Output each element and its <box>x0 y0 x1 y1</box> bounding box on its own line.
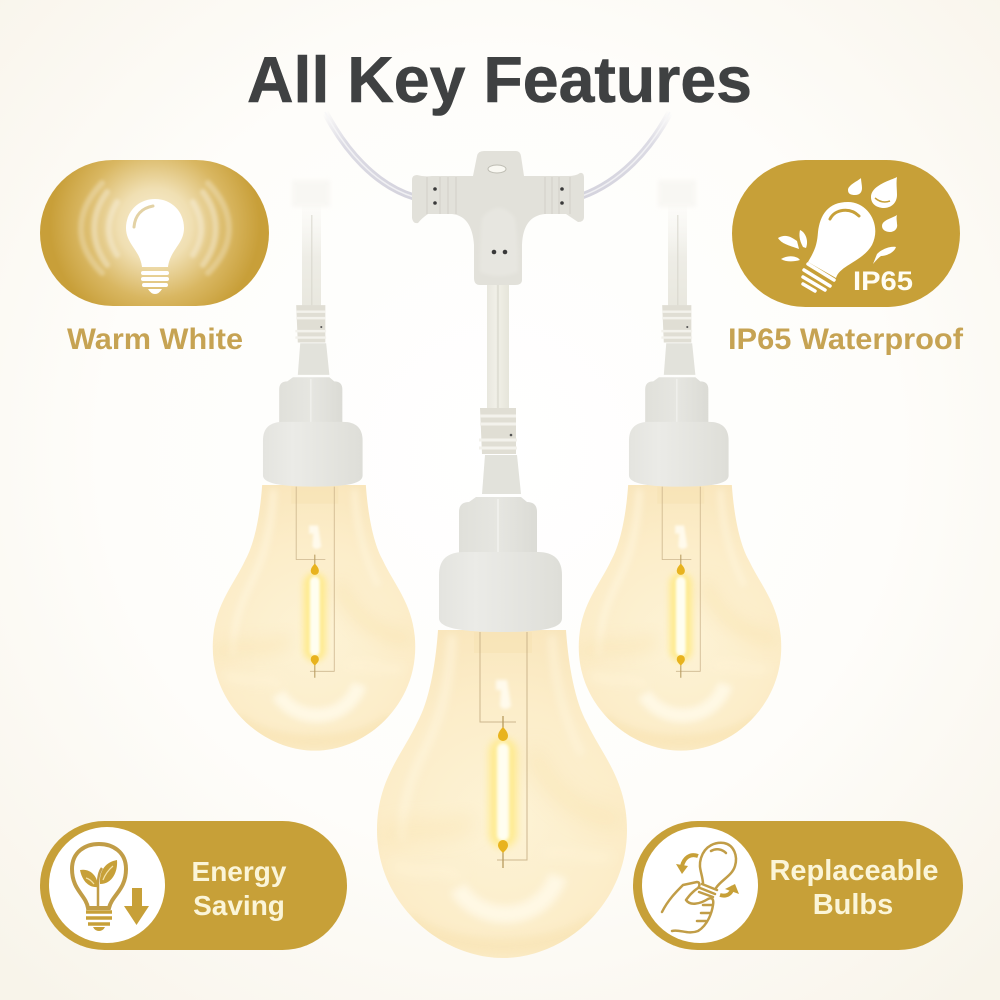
panel: replaceable bulbs <box>633 821 963 950</box>
right bulb cable <box>658 180 696 310</box>
icon: energy saving bulb <box>49 827 165 943</box>
product: string light wires and T connector <box>325 112 670 410</box>
panel: IP65 waterproof <box>732 160 960 307</box>
pill background <box>40 821 347 950</box>
label: IP65 waterproof: IP65 Waterproof <box>728 323 963 356</box>
text: replaceable bulbs: Bulbs <box>813 889 893 921</box>
icon: glowing bulb <box>81 183 229 294</box>
text: replaceable bulbs: Replaceable <box>770 855 938 887</box>
cable: centre drop <box>487 285 509 410</box>
centre light bulb <box>377 408 627 958</box>
icon: hand replacing bulb <box>642 827 758 943</box>
panel: warm white <box>40 160 269 306</box>
icon: waterproof bulb <box>778 177 913 296</box>
left light bulb <box>213 305 415 751</box>
wire: right cable <box>582 112 670 196</box>
left bulb cable <box>292 180 330 310</box>
pill background <box>732 160 960 307</box>
text: energy saving: Energy <box>192 856 287 887</box>
T connector <box>412 151 584 285</box>
text: energy saving: Saving <box>193 890 285 921</box>
right light bulb <box>579 305 781 751</box>
pill background <box>633 821 963 950</box>
title: All Key Features <box>247 43 752 116</box>
label: warm white: Warm White <box>67 323 243 356</box>
pill background <box>40 160 269 306</box>
panel: energy saving <box>40 821 347 950</box>
wire: left cable <box>325 112 414 197</box>
icon: waterproof bulb: IP65 <box>853 266 913 296</box>
